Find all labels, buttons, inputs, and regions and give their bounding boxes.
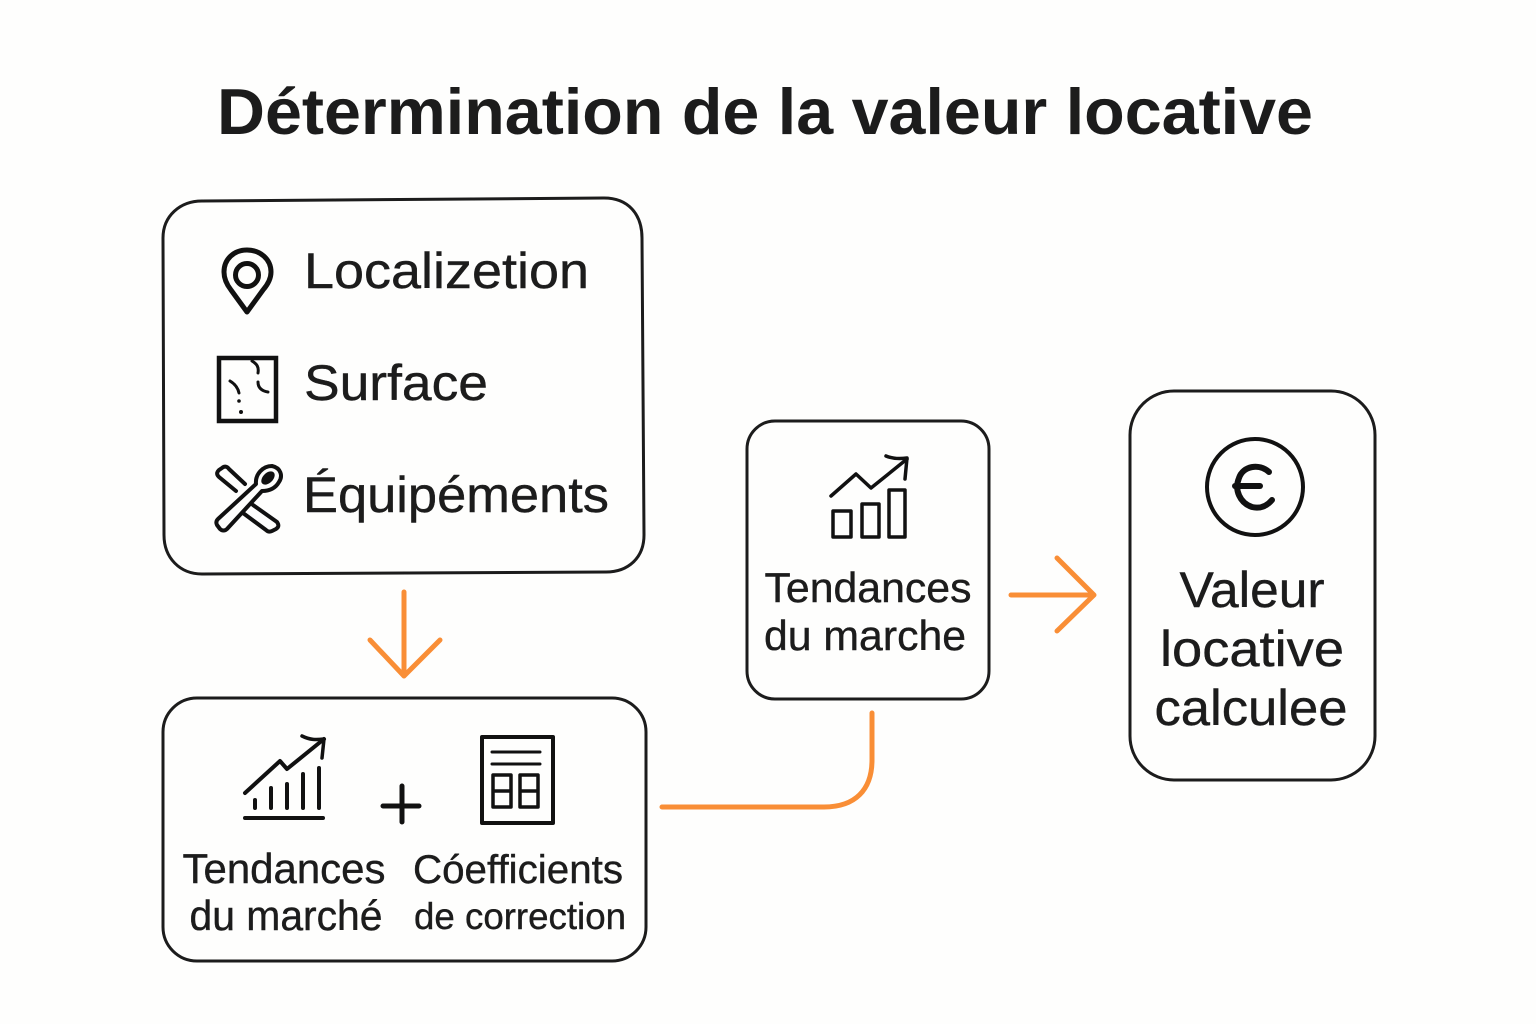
icon: plus xyxy=(383,786,419,822)
arrow: connector up xyxy=(662,713,872,807)
icon: trend bars xyxy=(245,736,324,818)
label: Coefficients de correction xyxy=(413,848,626,937)
label: Coefficients de correction: de correction xyxy=(414,896,626,937)
label: Tendances du marche: Tendances xyxy=(764,564,972,611)
icon: surface plan xyxy=(219,358,276,421)
label: Tendances du marche: du marche xyxy=(764,612,966,659)
icon: euro coin xyxy=(1207,439,1303,535)
label: Équipements: Équipéments xyxy=(303,467,609,523)
label: Tendances du marché: Tendances xyxy=(182,845,386,892)
icon: location pin xyxy=(224,250,271,312)
panel: market trends and coefficients xyxy=(163,698,646,961)
label: Valeur locative calculee: locative xyxy=(1160,621,1344,677)
title: Détermination de la valeur locative xyxy=(217,75,1313,148)
panel: input criteria xyxy=(163,198,644,574)
label: Valeur locative calculee xyxy=(1154,562,1348,736)
label: Surface: Surface xyxy=(304,355,488,411)
label: Valeur locative calculee: calculee xyxy=(1154,680,1348,736)
arrow: right xyxy=(1011,558,1094,631)
label: Valeur locative calculee: Valeur xyxy=(1180,562,1324,618)
label: Coefficients de correction: Cóefficients xyxy=(413,848,623,892)
icon: growth chart xyxy=(831,456,907,537)
icon: coefficient table xyxy=(482,737,553,823)
icon: crossed tools xyxy=(216,466,281,532)
label: Tendances du marché: du marché xyxy=(190,892,382,939)
label: Tendances du marche xyxy=(764,564,972,659)
label: Localization: Localizetion xyxy=(304,243,589,299)
panel: result xyxy=(1130,391,1375,780)
arrow: down xyxy=(370,592,440,676)
panel: market trends xyxy=(747,421,989,699)
label: Tendances du marché xyxy=(182,845,386,939)
